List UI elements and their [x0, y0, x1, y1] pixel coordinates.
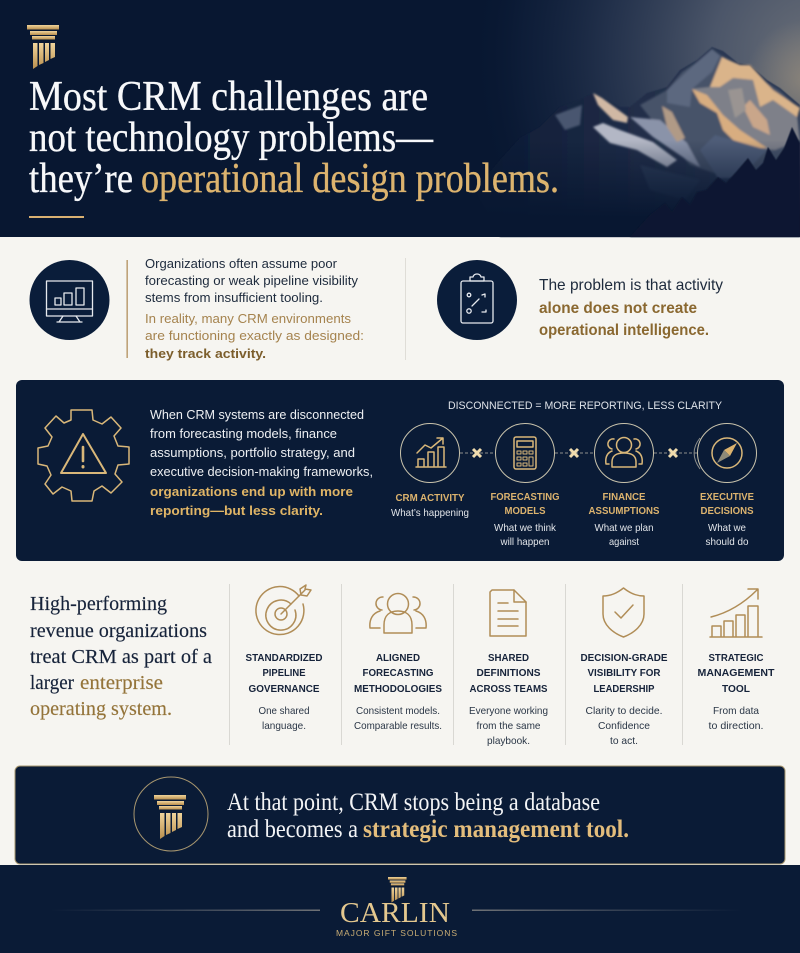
column: decision-grade visibility: LEADERSHIP [594, 683, 654, 695]
high-performing statement: High-performing [30, 593, 167, 615]
panel: activity statement: operational intelligence. [539, 322, 709, 339]
panel: assumption text: are functioning exactly as designed: [145, 328, 364, 343]
column: pipeline governance: language. [262, 720, 306, 732]
column: forecasting methodologies: ALIGNED [376, 652, 420, 664]
panel: assumption text: In reality, many CRM environments [145, 311, 352, 326]
node: finance assumptions: ASSUMPTIONS [588, 505, 660, 517]
high-performing statement: enterprise [80, 672, 163, 694]
brand tagline: MAJOR GIFT SOLUTIONS [336, 928, 457, 938]
logo: column [388, 877, 407, 903]
column: strategic management tool: to direction. [708, 720, 764, 732]
warning paragraph: assumptions, portfolio strategy, and [150, 445, 355, 460]
column: forecasting methodologies: METHODOLOGIES [354, 683, 442, 695]
icon: target [256, 585, 311, 635]
icon: column in circle [134, 777, 208, 851]
node: forecasting models: What we think [494, 522, 557, 534]
column: pipeline governance: One shared [258, 705, 310, 717]
warning paragraph: organizations end up with more [150, 484, 353, 499]
hero title: they’re [29, 156, 133, 202]
mountain photo illustration [440, 0, 800, 237]
node: executive decisions: EXECUTIVE [700, 491, 754, 503]
column: pipeline governance: PIPELINE [262, 667, 306, 679]
column: shared definitions: ACROSS TEAMS [470, 683, 548, 695]
column: strategic management tool: From data [713, 705, 759, 717]
tree line [630, 127, 800, 237]
icon: monitor with bar chart [30, 260, 110, 340]
high-performing statement: revenue organizations [30, 620, 207, 642]
column: forecasting methodologies: Consistent models. [356, 705, 440, 717]
warning paragraph: reporting—but less clarity. [150, 503, 323, 518]
panel: activity statement [405, 258, 723, 360]
closing banner [15, 766, 785, 864]
column: shared definitions: SHARED [488, 652, 529, 664]
column: pipeline governance: GOVERNANCE [248, 683, 320, 695]
footer [0, 865, 800, 953]
column: strategic management tool [698, 589, 775, 732]
icon: growth chart [710, 589, 762, 637]
icon: gear with warning [38, 410, 129, 501]
node: finance assumptions: FINANCE [602, 491, 646, 503]
hero accent rule [29, 216, 84, 218]
panel: activity statement: alone does not create [539, 300, 697, 317]
hero title: not technology problems— [29, 115, 434, 161]
brand name: CARLIN [340, 897, 450, 929]
diagram heading: DISCONNECTED = MORE REPORTING, LESS CLARITY [448, 400, 723, 412]
node: executive decisions [694, 424, 756, 548]
node: forecasting models: FORECASTING [490, 491, 560, 503]
node: finance assumptions: against [609, 536, 639, 548]
node: forecasting models: will happen [500, 536, 550, 548]
logo: column [27, 25, 59, 69]
column: strategic management tool: TOOL [722, 683, 751, 695]
node: forecasting models: MODELS [504, 505, 546, 517]
hero title: operational design problems. [141, 156, 559, 202]
icon: clipboard [437, 260, 517, 340]
panel: assumption text: forecasting or weak pipeline visibility [145, 273, 359, 288]
hero title: Most CRM challenges are [29, 74, 428, 120]
closing statement: strategic management tool. [363, 816, 629, 843]
column dividers [229, 584, 683, 745]
column: decision-grade visibility: VISIBILITY FOR [588, 667, 661, 679]
node: executive decisions: should do [706, 536, 749, 548]
node: CRM activity: What’s happening [391, 507, 469, 519]
warning paragraph: executive decision-making frameworks, [150, 464, 373, 479]
panel: assumption text: stems from insufficient tooling. [145, 290, 323, 305]
high-performing statement: operating system. [30, 698, 172, 720]
node: executive decisions: What we [708, 522, 746, 534]
panel: assumption text: Organizations often assume poor [145, 256, 338, 271]
panel: disconnected systems [16, 380, 784, 561]
panel: assumption text: they track activity. [145, 346, 266, 361]
column: forecasting methodologies: Comparable results. [354, 720, 442, 732]
high-performing statement: larger [30, 672, 74, 694]
high-performing statement [30, 593, 212, 720]
node: CRM activity [391, 424, 469, 519]
node: forecasting models [490, 424, 560, 548]
panel: assumption text [30, 256, 364, 361]
node: finance assumptions [588, 424, 660, 548]
high-performing statement: treat CRM as part of a [30, 646, 212, 668]
node: CRM activity: CRM ACTIVITY [396, 492, 464, 504]
icon: people [370, 594, 426, 633]
column: decision-grade visibility: DECISION-GRADE [580, 652, 668, 664]
column: strategic management tool: STRATEGIC [708, 652, 764, 664]
column: decision-grade visibility: Clarity to decide. [586, 705, 662, 717]
column: decision-grade visibility [580, 588, 668, 747]
column: strategic management tool: MANAGEMENT [698, 667, 775, 679]
closing statement [227, 789, 629, 843]
column: decision-grade visibility: Confidence [598, 720, 650, 732]
panel: activity statement: The problem is that activity [539, 277, 723, 294]
warning paragraph: from forecasting models, finance [150, 426, 337, 441]
column: shared definitions: playbook. [487, 735, 530, 747]
connectors with x marks [460, 449, 697, 457]
column: pipeline governance: STANDARDIZED [246, 652, 323, 664]
warning paragraph: When CRM systems are disconnected [150, 407, 364, 422]
icon: document [490, 590, 526, 636]
column: shared definitions: Everyone working [469, 705, 548, 717]
warning paragraph [150, 407, 373, 518]
column: shared definitions: DEFINITIONS [476, 667, 540, 679]
closing statement: and becomes a [227, 816, 358, 843]
node: finance assumptions: What we plan [594, 522, 654, 534]
hero banner [0, 0, 800, 237]
hero title [29, 74, 559, 202]
column: pipeline governance [246, 585, 323, 732]
column: shared definitions: from the same [476, 720, 541, 732]
column: shared definitions [469, 590, 548, 747]
closing statement: At that point, CRM stops being a database [227, 789, 600, 816]
column: forecasting methodologies [354, 594, 442, 732]
icon: shield [603, 588, 644, 637]
column: decision-grade visibility: to act. [610, 735, 638, 747]
node: executive decisions: DECISIONS [700, 505, 754, 517]
column: forecasting methodologies: FORECASTING [362, 667, 434, 679]
